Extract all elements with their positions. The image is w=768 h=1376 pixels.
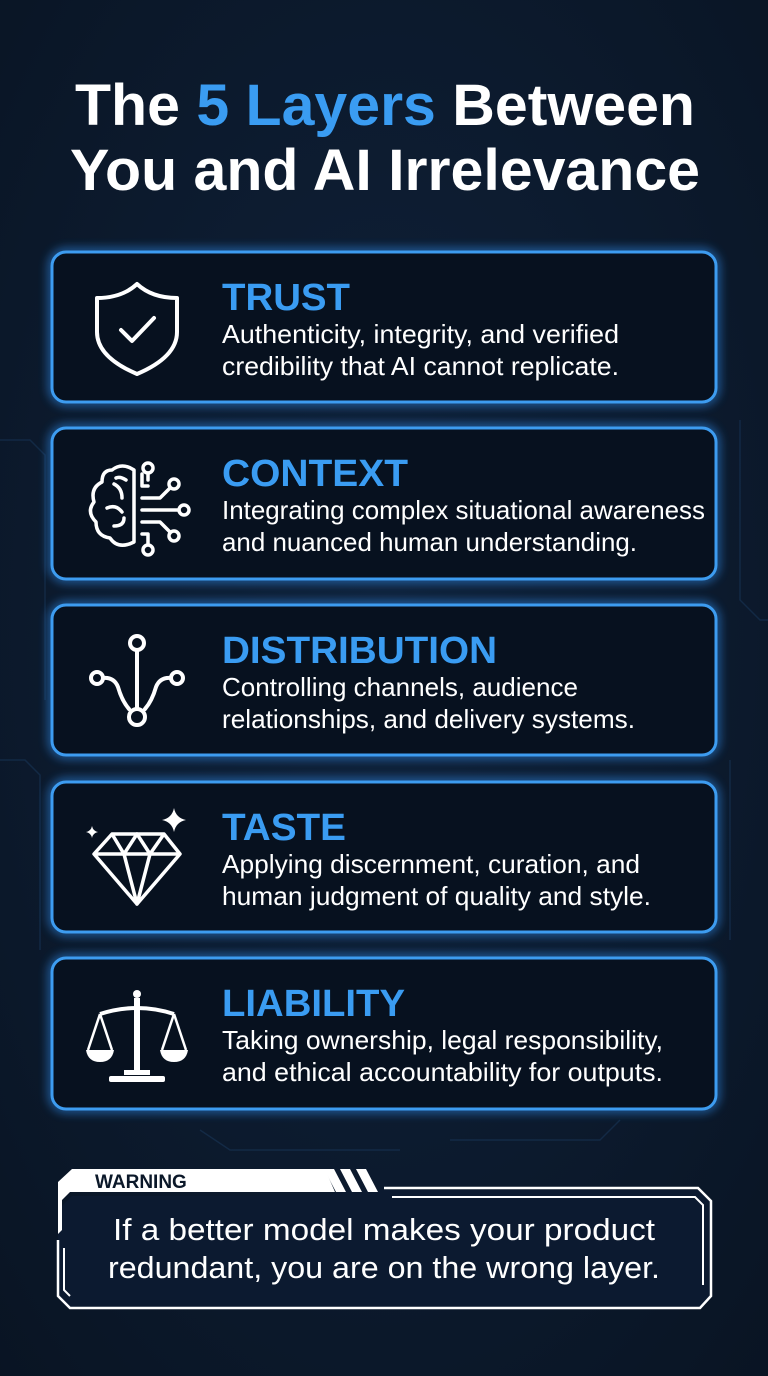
card: distribution: DISTRIBUTION [222,630,497,672]
icon: diamond [94,834,180,904]
card: liability: LIABILITY [222,983,405,1025]
card: taste: human judgment of quality and style. [222,881,651,911]
card: taste [52,782,716,932]
icon: scales [86,990,188,1082]
card: distribution: relationships, and delivery systems. [222,704,635,734]
icon: shield [97,284,177,374]
callout: warning: If a better model makes your product [113,1212,655,1247]
title: You and AI Irrelevance [70,138,700,203]
title [70,73,700,203]
callout: warning: WARNING [95,1172,187,1193]
card: liability [52,958,716,1109]
card: taste: TASTE [222,807,346,849]
card: context [52,428,716,579]
card: context: and nuanced human understanding. [222,527,637,557]
card: trust: credibility that AI cannot replicate. [222,351,619,381]
card: context: Integrating complex situational awareness [222,495,705,525]
card: taste: Applying discernment, curation, and [222,849,640,879]
icon: network nodes [91,636,183,725]
card: context: CONTEXT [222,453,408,495]
title: The 5 Layers Between [75,73,695,138]
callout: warning: redundant, you are on the wrong layer. [108,1250,660,1285]
card: trust: Authenticity, integrity, and verified [222,319,619,349]
card: distribution [52,605,716,755]
card: trust [52,252,716,402]
icon: brain circuit [90,463,189,555]
card: trust: TRUST [222,277,350,319]
card: distribution: Controlling channels, audience [222,672,578,702]
card: liability: and ethical accountability for outputs. [222,1057,663,1087]
callout: warning [58,1169,711,1308]
card: liability: Taking ownership, legal responsibility, [222,1025,663,1055]
